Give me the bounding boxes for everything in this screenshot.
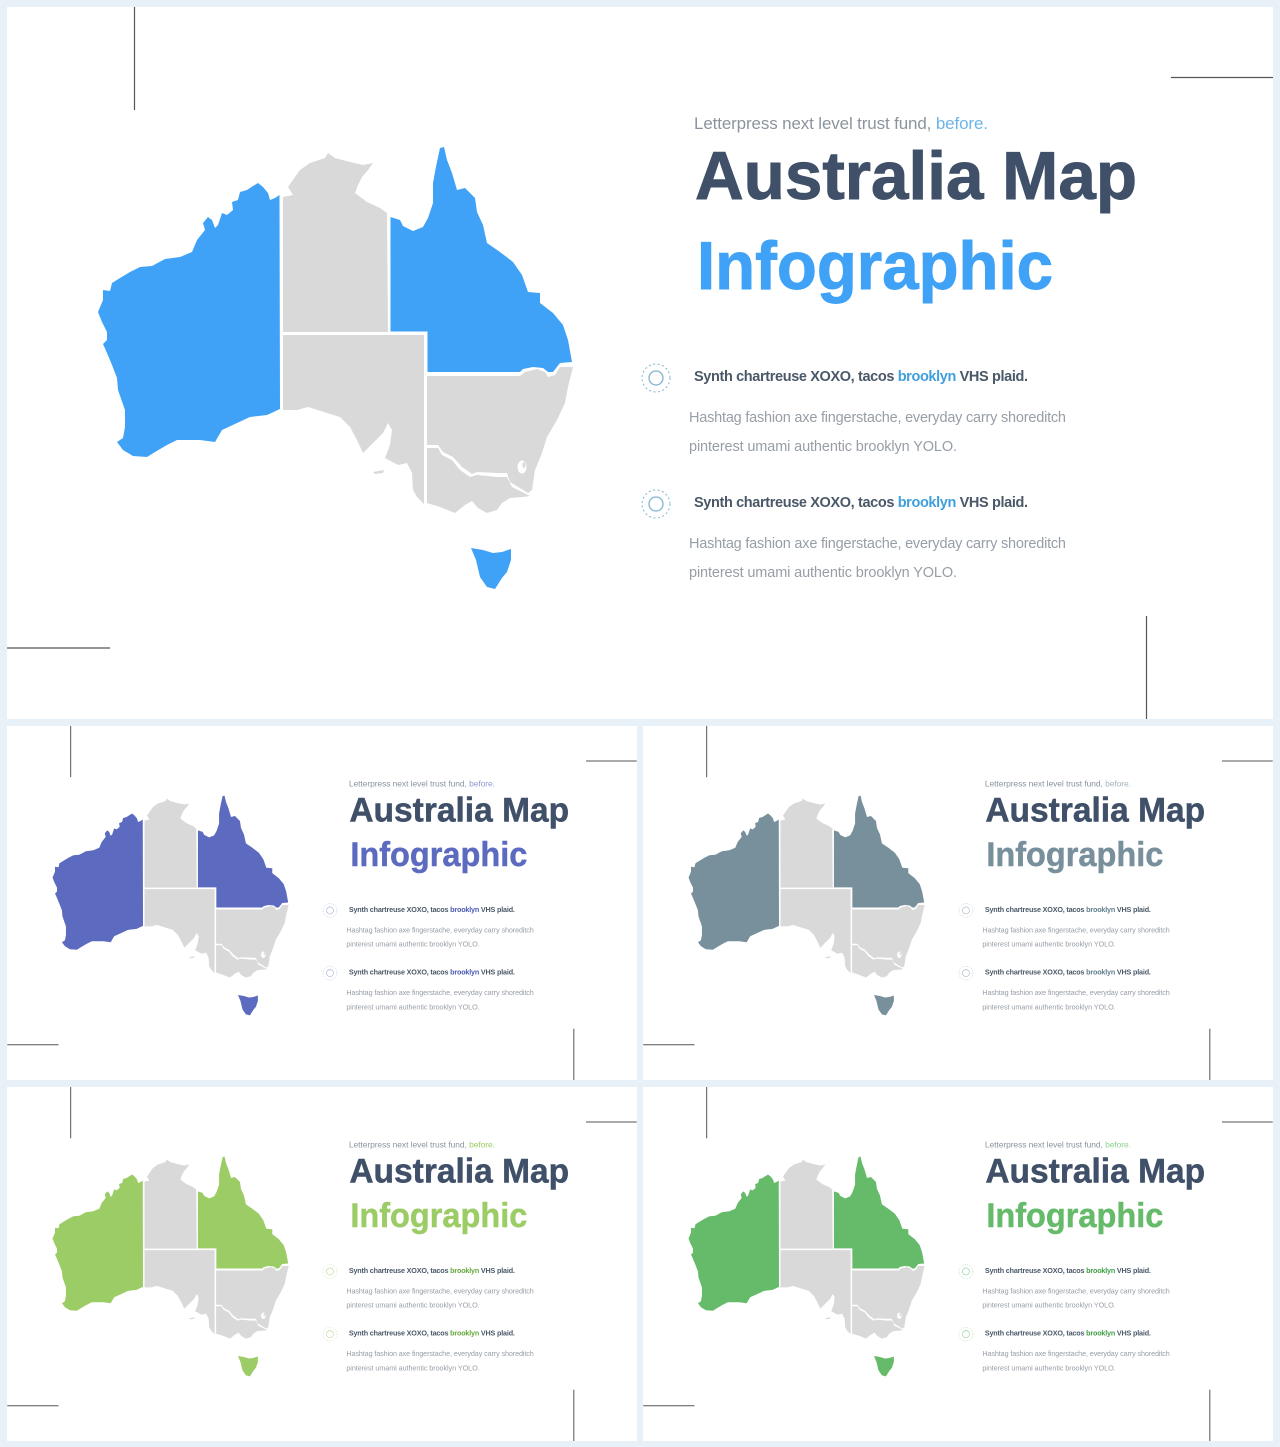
bullet text: Hashtag fashion axe fingerstache, everyday carry shoreditch [689,410,1066,426]
bullet text [982,1349,1170,1372]
bullet 1 [323,903,534,949]
bullet text [346,988,534,1011]
bullet text: pinterest umami authentic brooklyn YOLO. [346,940,480,949]
title: Australia Map [985,1152,1205,1190]
bullet 1 [323,1264,534,1310]
bullet text: Hashtag fashion axe fingerstache, everyday carry shoreditch [982,1286,1170,1295]
map of Australia [53,796,289,1015]
bullet 2 [323,1327,534,1372]
corner lines [7,1087,637,1441]
icon: ring [323,903,337,917]
title: Australia Map [695,138,1137,214]
bullet heading: Synth chartreuse XOXO, tacos brooklyn VHS plaid. [349,1329,515,1338]
tagline: Letterpress next level trust fund, before. [349,779,495,789]
bullet heading: Synth chartreuse XOXO, tacos brooklyn VHS plaid. [694,369,1028,385]
tagline: Letterpress next level trust fund, before. [985,1140,1131,1150]
bullet heading: Synth chartreuse XOXO, tacos brooklyn VHS plaid. [349,1266,515,1275]
tagline: Letterpress next level trust fund, before. [985,779,1131,789]
tagline: Letterpress next level trust fund, before. [694,114,988,133]
bullet text [689,410,1066,455]
panel: main blue slide [7,7,1273,719]
bullet text: pinterest umami authentic brooklyn YOLO. [982,1002,1116,1011]
bullet heading: Synth chartreuse XOXO, tacos brooklyn VHS plaid. [985,1329,1151,1338]
corner lines [7,7,1273,719]
bullet text: Hashtag fashion axe fingerstache, everyday carry shoreditch [982,925,1170,934]
panel: green slide [643,1087,1273,1441]
corner lines [643,1087,1273,1441]
bullet text: Hashtag fashion axe fingerstache, everyday carry shoreditch [346,925,534,934]
bullet text [982,988,1170,1011]
bullet 1 [959,903,1170,949]
panel: light green slide [7,1087,637,1441]
corner lines [643,726,1273,1080]
icon: ring [959,966,973,980]
bullet text: pinterest umami authentic brooklyn YOLO. [689,565,957,581]
bullet text: pinterest umami authentic brooklyn YOLO. [346,1301,480,1310]
bullet text: pinterest umami authentic brooklyn YOLO. [689,439,957,455]
icon: ring [323,1327,337,1341]
icon: ring [642,364,670,392]
map of Australia [689,796,925,1015]
bullet text [346,1349,534,1372]
icon: ring [959,1264,973,1278]
icon: ring [959,903,973,917]
bullet text [346,1286,534,1310]
bullet heading: Synth chartreuse XOXO, tacos brooklyn VHS plaid. [349,968,515,977]
title: Australia Map [349,1152,569,1190]
bullet 2 [323,966,534,1011]
corner lines [7,726,637,1080]
bullet 1 [642,364,1066,455]
bullet text: pinterest umami authentic brooklyn YOLO. [346,1002,480,1011]
bullet 2 [959,1327,1170,1372]
bullet 2 [959,966,1170,1011]
bullet text: Hashtag fashion axe fingerstache, everyday carry shoreditch [982,988,1170,997]
icon: ring [642,490,670,518]
bullet heading: Synth chartreuse XOXO, tacos brooklyn VHS plaid. [694,495,1028,511]
tagline: Letterpress next level trust fund, before. [349,1140,495,1150]
bullet text [689,536,1066,581]
bullet text: pinterest umami authentic brooklyn YOLO. [982,940,1116,949]
icon: ring [959,1327,973,1341]
subtitle: Infographic [697,228,1053,304]
bullet text [982,1286,1170,1310]
bullet text: Hashtag fashion axe fingerstache, everyday carry shoreditch [689,536,1066,552]
panel: indigo slide [7,726,637,1080]
bullet text: pinterest umami authentic brooklyn YOLO. [982,1301,1116,1310]
bullet heading: Synth chartreuse XOXO, tacos brooklyn VHS plaid. [985,905,1151,914]
panel: slate slide [643,726,1273,1080]
bullet 2 [642,490,1066,581]
title: Australia Map [349,791,569,829]
bullet heading: Synth chartreuse XOXO, tacos brooklyn VHS plaid. [985,968,1151,977]
subtitle: Infographic [350,836,527,874]
map of Australia [689,1157,925,1376]
map of Australia [53,1157,289,1376]
bullet text [346,925,534,949]
icon: ring [323,966,337,980]
title: Australia Map [985,791,1205,829]
bullet 1 [959,1264,1170,1310]
bullet text: pinterest umami authentic brooklyn YOLO. [346,1363,480,1372]
bullet text [982,925,1170,949]
subtitle: Infographic [350,1197,527,1235]
subtitle: Infographic [986,836,1163,874]
bullet text: pinterest umami authentic brooklyn YOLO. [982,1363,1116,1372]
icon: ring [323,1264,337,1278]
bullet text: Hashtag fashion axe fingerstache, everyday carry shoreditch [982,1349,1170,1358]
bullet text: Hashtag fashion axe fingerstache, everyday carry shoreditch [346,988,534,997]
bullet heading: Synth chartreuse XOXO, tacos brooklyn VHS plaid. [349,905,515,914]
bullet text: Hashtag fashion axe fingerstache, everyday carry shoreditch [346,1286,534,1295]
map of Australia [98,147,573,589]
subtitle: Infographic [986,1197,1163,1235]
bullet heading: Synth chartreuse XOXO, tacos brooklyn VHS plaid. [985,1266,1151,1275]
bullet text: Hashtag fashion axe fingerstache, everyday carry shoreditch [346,1349,534,1358]
